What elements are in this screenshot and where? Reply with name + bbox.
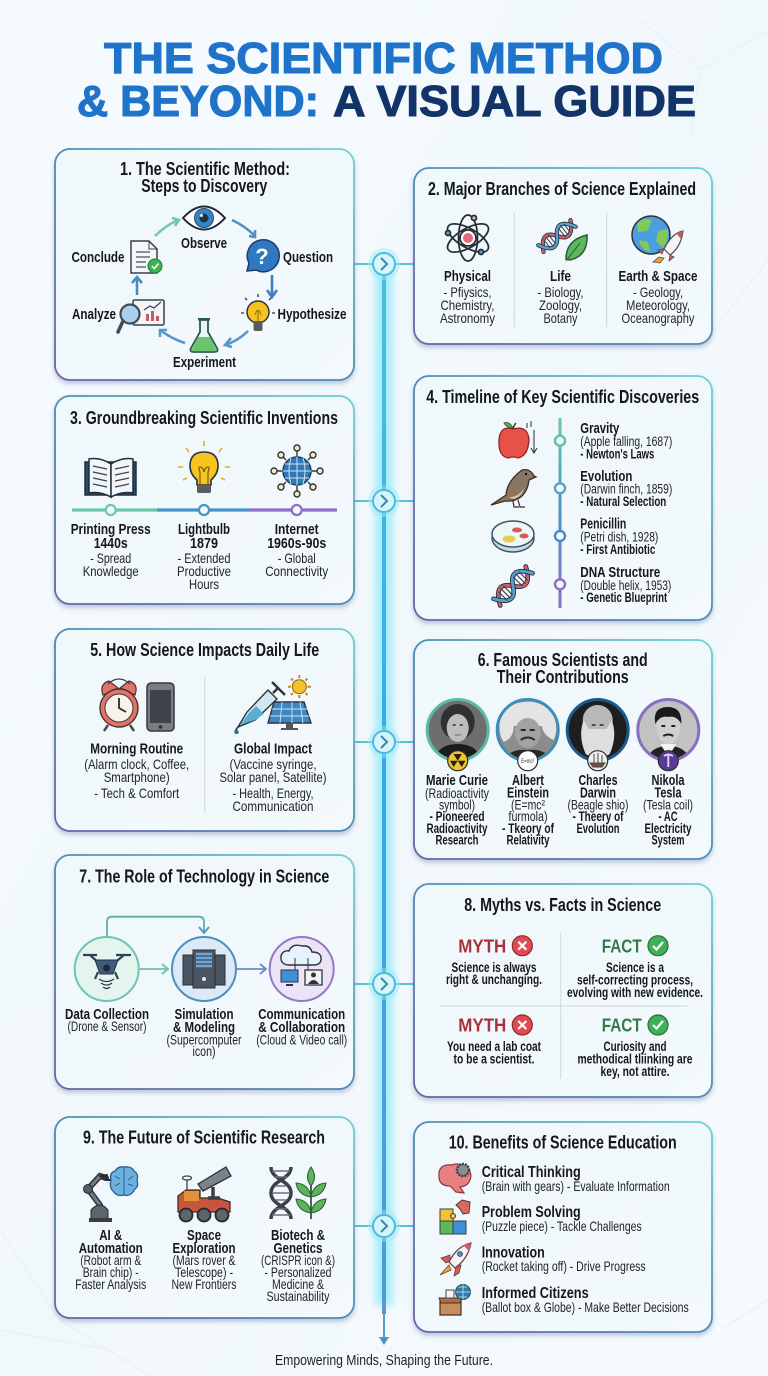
timeline node 5: [368, 1210, 400, 1242]
text: communication and collaboration: Communication: [258, 1006, 345, 1023]
benefit: innovation: (Rocket taking off) - Drive Progress: [482, 1259, 646, 1274]
heading 10: 10. Benefits of Science Education: [449, 1132, 677, 1152]
benefit: critical thinking: Critical Thinking: [482, 1164, 581, 1181]
panel 9: future of research: [55, 1117, 354, 1318]
icon: question bubble: [247, 240, 279, 272]
text: morning routine: Morning Routine: [90, 740, 183, 758]
icon: connected globe: [271, 445, 323, 497]
text: charles darwin: Evolution: [576, 821, 620, 836]
text: nikola tesla: - AC: [658, 809, 678, 824]
text: printing press: Printing Press: [71, 521, 151, 538]
text: simulation and modeling: & Modeling: [173, 1019, 235, 1036]
step labels: Conclude: [72, 249, 124, 266]
text: lightbulb: Lightbulb: [178, 521, 230, 538]
text: biotech and genetics: Genetics: [274, 1240, 322, 1257]
text: global impact: Communication: [232, 799, 314, 814]
badge: beagle ship: [588, 751, 608, 771]
invention timeline: [72, 505, 337, 515]
column text: earth and space: - Geology,: [633, 285, 683, 300]
panel 1: the scientific method: [55, 149, 354, 380]
panel 8: myths vs facts: [414, 884, 712, 1097]
text: simulation and modeling: Simulation: [174, 1006, 234, 1023]
panel 10: benefits of science education: [414, 1122, 712, 1332]
step labels: [72, 235, 346, 371]
title: & BEYOND:: [77, 77, 319, 126]
column text: earth and space: Oceanography: [622, 311, 695, 326]
step labels: Experiment: [173, 354, 236, 371]
heading 3: 3. Groundbreaking Scientific Inventions: [70, 408, 338, 428]
icon: falling apple: [499, 421, 537, 458]
discovery timeline line: [555, 418, 565, 608]
text: evolution: [580, 468, 672, 509]
icon: brain with gears: [439, 1164, 471, 1193]
fact 2: methodical tliinking are: [578, 1052, 693, 1066]
text: space exploration: New Frontiers: [172, 1277, 237, 1292]
icon: eye: [183, 206, 225, 230]
column text: physical: [440, 268, 495, 326]
title: A VISUAL GUIDE: [333, 77, 696, 126]
text: space exploration: [172, 1227, 237, 1292]
timeline node 2: [368, 485, 400, 517]
title: [77, 34, 696, 126]
icon: atom: [443, 215, 493, 261]
benefit: problem solving: (Puzzle piece) - Tackle Challenges: [482, 1219, 642, 1234]
benefit: problem solving: [482, 1204, 642, 1234]
text: internet: Internet: [275, 521, 319, 538]
icon: flask: [190, 318, 218, 352]
icon: dna and leaf: [537, 218, 587, 261]
text: gravity: [580, 420, 672, 462]
text: ai and automation: (Robot arm &: [80, 1253, 141, 1268]
column text: physical: Chemistry,: [440, 298, 494, 313]
text: lightbulb: - Extended: [178, 551, 230, 566]
benefit: critical thinking: [482, 1164, 670, 1194]
text: dna structure: - Genetic Blueprint: [580, 590, 668, 605]
icon: magnifier and chart: [118, 300, 164, 332]
heading 2: 2. Major Branches of Science Explained: [428, 179, 696, 199]
myth 2: to be a scientist.: [454, 1052, 534, 1066]
text: gravity: (Apple falling, 1687): [580, 434, 672, 449]
portrait: albert einstein: [497, 699, 559, 761]
text: global impact: (Vaccine syringe,: [230, 757, 316, 772]
badge: tesla coil: [658, 751, 678, 771]
text: printing press: - Spread: [90, 551, 131, 566]
text: ai and automation: Faster Analysis: [75, 1277, 146, 1292]
text: space exploration: Telescope) -: [175, 1265, 233, 1280]
icon: lightbulb: [241, 294, 275, 331]
cycle arrows: [132, 218, 277, 347]
timeline node 4: [368, 968, 400, 1000]
text: space exploration: Exploration: [172, 1240, 236, 1257]
icon: solar panel: [268, 702, 311, 730]
text: data collection: [65, 1006, 149, 1034]
text: charles darwin: - Theery of: [572, 809, 624, 824]
panel 2: major branches of science: [414, 168, 712, 344]
benefit: problem solving: Problem Solving: [482, 1204, 581, 1221]
column text: physical: Physical: [444, 268, 491, 285]
panel 5: science in daily life: [55, 629, 354, 831]
myth 2: You need a lab coat: [447, 1039, 541, 1054]
text: nikola tesla: Nikola: [652, 772, 685, 789]
portrait: marie curie: [427, 699, 489, 761]
text: albert einstein: [502, 772, 554, 848]
myth 1: right & unchanging.: [446, 972, 542, 987]
icon: sun: [288, 675, 311, 698]
text: communication and collaboration: [256, 1006, 347, 1048]
title: THE SCIENTIFIC METHOD: [104, 34, 663, 83]
icon: puzzle: [440, 1200, 470, 1234]
text: charles darwin: Darwin: [580, 784, 616, 802]
badge: equation: E=mc²: [521, 759, 534, 765]
node: supercomputer: [172, 937, 236, 1001]
benefit: informed citizens: [482, 1285, 689, 1315]
myth 2: [447, 1015, 541, 1066]
icon: petri dish: [492, 521, 534, 552]
text: gravity: - Newton's Laws: [580, 446, 654, 462]
heading 6: [478, 650, 648, 687]
text: printing press: 1440s: [94, 535, 128, 552]
text: data collection: (Drone & Sensor): [68, 1019, 146, 1034]
text: lightbulb: 1879: [190, 535, 218, 552]
heading 4: 4. Timeline of Key Scientific Discoveries: [426, 387, 699, 407]
text: biotech and genetics: [261, 1227, 335, 1304]
icon: dna ladder: [271, 1167, 291, 1219]
step labels: Observe: [181, 235, 227, 252]
benefit: informed citizens: Informed Citizens: [482, 1285, 589, 1302]
footer tagline: Empowering Minds, Shaping the Future.: [275, 1352, 493, 1369]
icon: finch: [491, 470, 536, 507]
node: drone: [75, 937, 139, 1001]
text: global impact: Solar panel, Satellite): [220, 770, 326, 785]
fact 1: [567, 936, 703, 1000]
text: internet: [265, 521, 328, 579]
text: evolution: (Darwin finch, 1859): [580, 482, 672, 496]
text: global impact: [220, 740, 326, 814]
portrait: charles darwin: [567, 699, 629, 761]
icon: ballot box and globe: [439, 1284, 470, 1315]
node: cloud and video call: [270, 937, 334, 1001]
text: morning routine: (Alarm clock, Coffee,: [84, 757, 189, 772]
myth 1: Science is always: [452, 960, 536, 975]
text: internet: - Global: [278, 551, 316, 566]
text: simulation and modeling: icon): [192, 1044, 216, 1059]
text: penicillin: Penicillin: [580, 516, 626, 532]
heading 5: 5. How Science Impacts Daily Life: [90, 640, 319, 660]
panel 7: role of technology: [55, 855, 354, 1089]
text: global impact: - Health, Energy,: [232, 786, 314, 801]
text: nikola tesla: Tesla: [654, 784, 682, 802]
text: marie curie: (Radioactivity: [425, 786, 489, 801]
fact 2: Curiosity and: [604, 1039, 666, 1054]
text: penicillin: [580, 516, 658, 557]
fact 1: FACT: [602, 936, 642, 956]
text: marie curie: - Pioneered: [430, 809, 484, 824]
text: lightbulb: Hours: [189, 577, 219, 592]
step labels: Question: [283, 249, 333, 266]
heading 6: Their Contributions: [497, 667, 629, 687]
heading 1: [120, 159, 290, 196]
text: nikola tesla: [643, 772, 693, 848]
text: dna structure: (Double helix, 1953): [580, 578, 671, 593]
text: marie curie: [425, 772, 489, 848]
text: lightbulb: Productive: [177, 564, 231, 579]
text: simulation and modeling: [166, 1006, 242, 1059]
text: nikola tesla: System: [652, 832, 684, 848]
column text: life: Botany: [544, 311, 578, 326]
text: space exploration: (Mars rover &: [172, 1253, 236, 1268]
fact 2: FACT: [602, 1016, 642, 1036]
benefit: innovation: Innovation: [482, 1244, 545, 1262]
heading 6: 6. Famous Scientists and: [478, 650, 648, 670]
text: evolution: - Natural Selection: [580, 494, 666, 509]
text: charles darwin: Charles: [578, 772, 618, 789]
panel 4: timeline of discoveries: [414, 376, 712, 620]
text: biotech and genetics: Sustainability: [266, 1289, 330, 1304]
column text: earth and space: [618, 268, 698, 326]
heading 1: Steps to Discovery: [141, 176, 267, 196]
text: ai and automation: Brain chip) -: [83, 1265, 139, 1280]
icon: brain chip: [110, 1167, 138, 1196]
text: biotech and genetics: Biotech &: [271, 1227, 325, 1244]
myth 1: MYTH: [458, 936, 506, 956]
heading 9: 9. The Future of Scientific Research: [83, 1128, 325, 1148]
benefit: informed citizens: (Ballot box & Globe) - Make Better Decisions: [482, 1300, 689, 1315]
icon: alarm clock: [100, 679, 138, 731]
column text: life: Life: [550, 268, 571, 285]
flow arrows: [107, 917, 266, 974]
text: biotech and genetics: (CRISPR icon &): [261, 1253, 335, 1268]
timeline node 1: [368, 248, 400, 280]
icon: open book: [85, 459, 136, 497]
text: marie curie: Radioactivity: [426, 821, 488, 836]
text: internet: 1960s-90s: [267, 535, 326, 552]
text: data collection: Data Collection: [65, 1006, 149, 1023]
text: communication and collaboration: (Cloud & Video call): [256, 1032, 347, 1048]
text: penicillin: (Petri dish, 1928): [580, 530, 658, 545]
text: global impact: Global Impact: [234, 740, 312, 758]
text: albert einstein: Relativity: [506, 832, 550, 848]
icon: earth and rocket: [632, 216, 683, 263]
text: albert einstein: (E=mc²: [511, 798, 545, 812]
column text: life: - Biology,: [538, 285, 584, 300]
text: marie curie: Marie Curie: [426, 772, 488, 789]
benefit: critical thinking: (Brain with gears) - Evaluate Information: [482, 1179, 670, 1194]
panel 6: famous scientists: [414, 640, 712, 859]
icon: syringe: [234, 682, 285, 734]
fact 1: evolving with new evidence.: [567, 985, 703, 1000]
text: lightbulb: [177, 521, 231, 592]
icon: mars rover and telescope: [178, 1167, 231, 1222]
text: biotech and genetics: - Personalized: [264, 1265, 332, 1280]
central timeline spine: [354, 264, 414, 1345]
icon: question bubble: ?: [255, 244, 269, 269]
panel 3: groundbreaking inventions: [55, 396, 354, 604]
column text: life: [538, 268, 584, 326]
fact 1: Science is a: [606, 960, 664, 975]
text: printing press: [71, 521, 151, 579]
column text: physical: Astronomy: [440, 311, 495, 326]
step labels: Analyze: [72, 306, 116, 323]
text: charles darwin: [568, 772, 628, 836]
icon: rocket: [440, 1243, 471, 1276]
step labels: Hypothesize: [278, 306, 346, 323]
text: printing press: Knowledge: [83, 564, 139, 579]
heading 7: 7. The Role of Technology in Science: [79, 866, 329, 886]
badge: radioactivity: [448, 751, 468, 771]
text: nikola tesla: Electricity: [644, 821, 692, 836]
text: dna structure: [580, 564, 671, 605]
column text: earth and space: Earth & Space: [618, 268, 698, 285]
column text: earth and space: Meteorology,: [626, 298, 690, 313]
myth 2: MYTH: [458, 1016, 506, 1036]
text: ai and automation: Automation: [79, 1240, 143, 1257]
text: dna structure: DNA Structure: [580, 564, 660, 581]
icon: lightbulb: [178, 441, 230, 493]
icon: plant: [296, 1167, 326, 1219]
text: nikola tesla: (Tesla coil): [643, 798, 693, 812]
text: internet: Connectivity: [265, 564, 328, 579]
text: albert einstein: - Tkeory of: [502, 821, 554, 836]
timeline node 3: [368, 726, 400, 758]
text: morning routine: [84, 740, 189, 801]
text: ai and automation: AI &: [99, 1227, 122, 1244]
text: marie curie: Research: [436, 832, 478, 848]
icon: dna helix: [491, 564, 535, 608]
icon: smartphone: [147, 683, 174, 731]
text: ai and automation: [75, 1227, 146, 1292]
text: albert einstein: furmola): [508, 809, 548, 824]
text: charles darwin: (Beagle shio): [568, 798, 628, 812]
text: albert einstein: Einstein: [507, 784, 549, 802]
text: morning routine: - Tech & Comfort: [94, 786, 179, 801]
portrait: nikola tesla: [637, 699, 699, 761]
fact 2: [578, 1015, 693, 1079]
text: simulation and modeling: (Supercomputer: [166, 1032, 242, 1048]
column text: life: Zoology,: [539, 298, 582, 313]
myth 1: [446, 936, 542, 987]
column text: physical: - Pfiysics,: [444, 285, 492, 300]
text: gravity: Gravity: [580, 420, 620, 437]
text: morning routine: Smartphone): [104, 770, 170, 785]
heading 1: 1. The Scientific Method:: [120, 159, 290, 179]
fact 2: key, not attire.: [600, 1064, 670, 1079]
badge: equation: [518, 751, 538, 771]
icon: document with check: [131, 241, 162, 273]
text: marie curie: symbol): [439, 798, 475, 812]
text: evolution: Evolution: [580, 468, 632, 485]
benefit: innovation: [482, 1244, 646, 1274]
text: albert einstein: Albert: [512, 772, 544, 789]
text: biotech and genetics: Medicine &: [272, 1277, 324, 1292]
text: penicillin: - First Antibiotic: [580, 542, 656, 557]
heading 8: 8. Myths vs. Facts in Science: [464, 895, 661, 915]
text: communication and collaboration: & Collaboration: [258, 1019, 345, 1036]
icon: robot arm: [84, 1175, 112, 1222]
text: space exploration: Space: [187, 1227, 221, 1244]
fact 1: self-correcting process,: [577, 972, 693, 988]
